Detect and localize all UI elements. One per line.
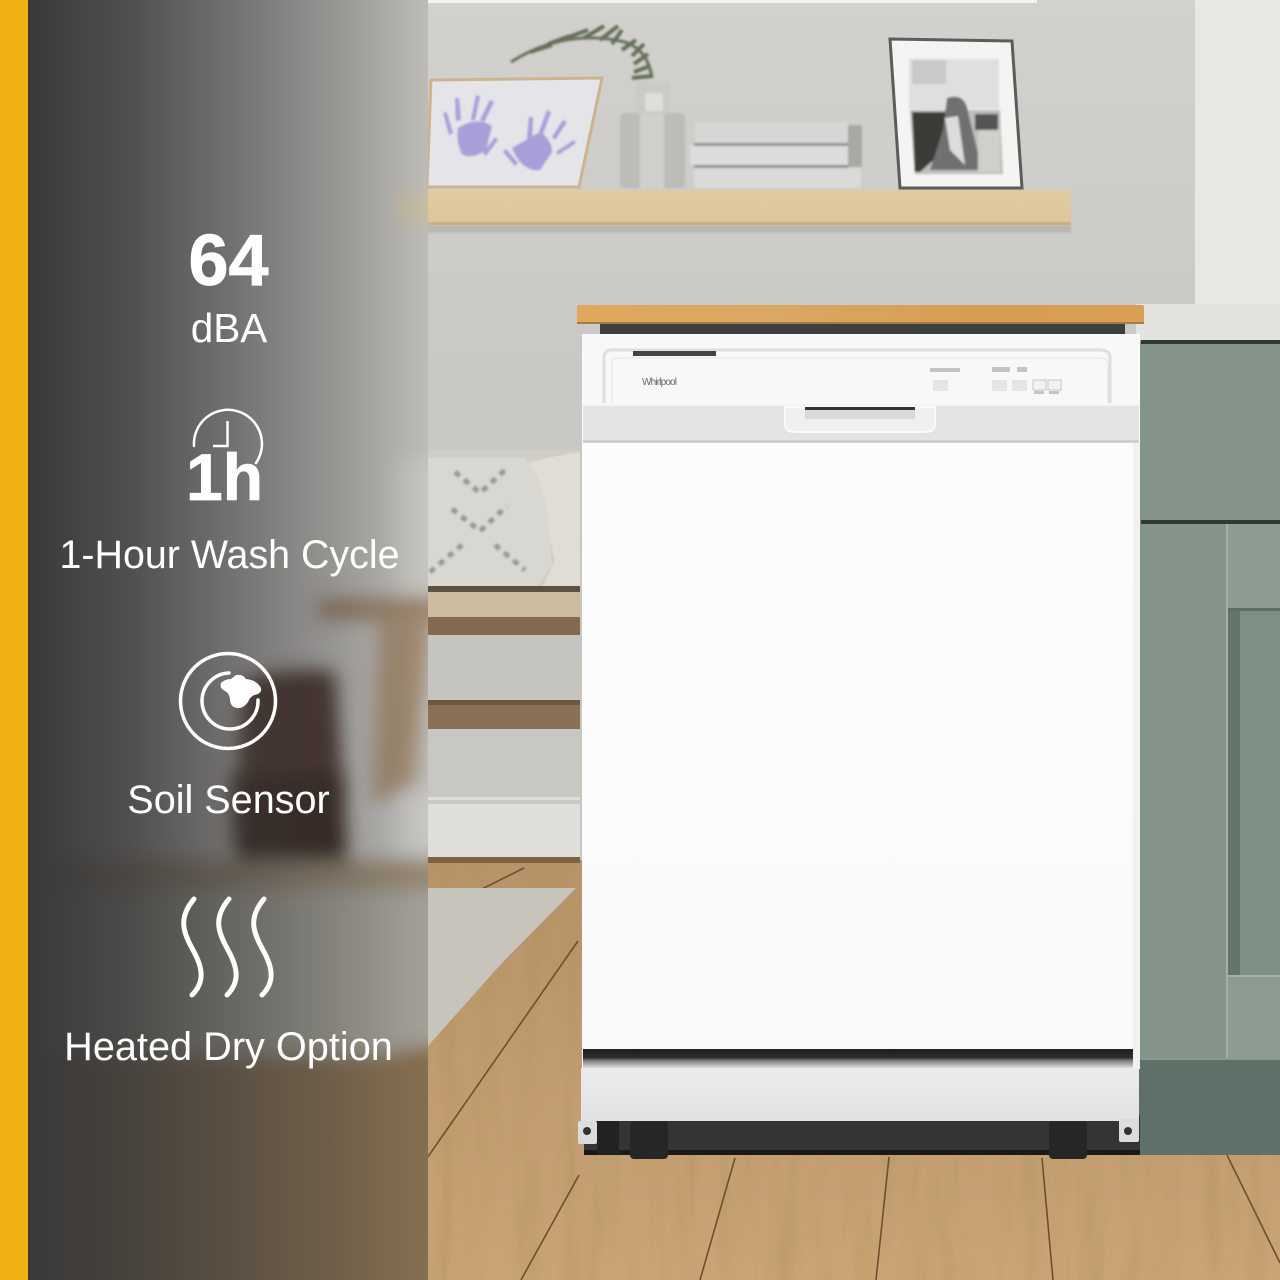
door side edge — [1133, 443, 1140, 1069]
floor rug — [427, 888, 576, 1047]
bench with cushions — [427, 450, 580, 729]
stack of books — [690, 122, 862, 188]
handprint picture frame — [427, 78, 602, 187]
glass vase — [620, 82, 685, 188]
door body — [582, 334, 1140, 1069]
lower slot — [583, 1049, 1133, 1068]
blurred left backdrop — [78, 0, 428, 1280]
icon: soil sensor — [180, 654, 276, 748]
unit dBA: dBA — [191, 305, 267, 351]
wooden floor — [425, 860, 1280, 1280]
green cabinets — [1138, 340, 1280, 1155]
countertop right — [1136, 304, 1280, 340]
leveling brackets — [578, 1119, 1139, 1144]
baseboard — [427, 735, 580, 863]
fern sprig — [511, 26, 652, 78]
value 64: 64 — [188, 221, 269, 301]
handle band — [583, 404, 1139, 443]
dishwasher — [577, 305, 1144, 1159]
framed black and white photo — [890, 39, 1022, 188]
feature: soil sensor — [127, 654, 330, 822]
feature: 1-hour wash cycle — [59, 410, 400, 577]
wooden top — [577, 305, 1144, 335]
top white ceiling strip — [427, 0, 1037, 3]
left dark gradient panel — [28, 0, 428, 1280]
feature: noise level — [188, 221, 269, 351]
icon: heat waves — [184, 899, 271, 995]
icon: clock with 1h: 1h — [186, 440, 263, 514]
label: Soil Sensor — [127, 778, 330, 822]
kick panel — [581, 1068, 1139, 1121]
wall shelf — [427, 190, 1071, 233]
base and wheels — [584, 1115, 1140, 1159]
control panel — [583, 335, 1139, 405]
brand logo: Whirlpool — [642, 377, 677, 388]
label: Heated Dry Option — [64, 1025, 393, 1069]
white pillar at upper right — [1195, 0, 1280, 305]
feature: heated dry — [64, 899, 393, 1069]
yellow accent strip — [0, 0, 28, 1280]
label: 1-Hour Wash Cycle — [59, 533, 400, 577]
